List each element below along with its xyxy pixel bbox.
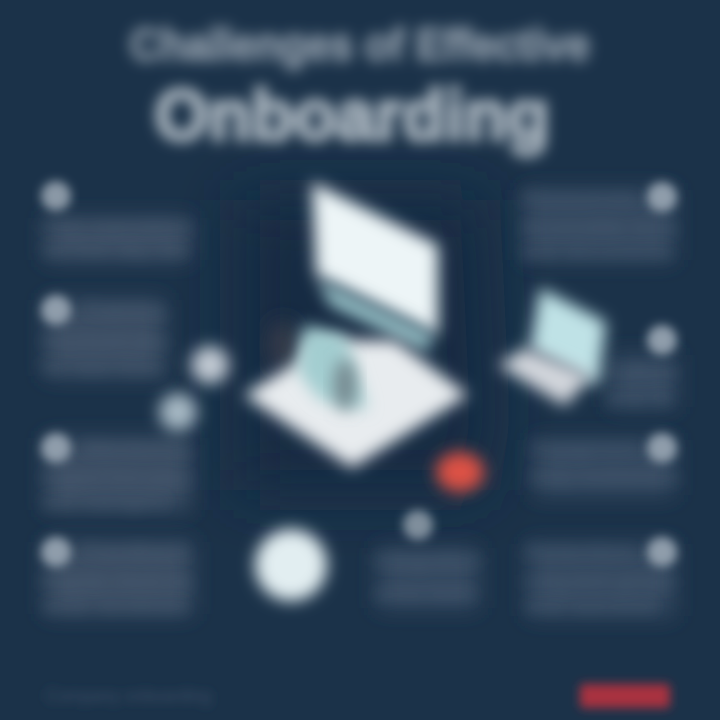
panel: right column items [522,182,677,616]
icon: red badge [436,452,484,492]
item: right 3 [532,433,677,495]
item: left 4: and reviews [42,596,187,616]
panel: left column items [41,181,192,616]
item: right 1: Accessible tools [522,218,677,238]
item: right 3: Engagement [532,438,637,458]
item: left 1 [41,181,192,260]
item: right 1: and documents [522,242,672,262]
item: left 3: Mentoring [84,438,189,458]
item: right 4: and success [525,596,655,616]
item: right 4 [525,537,677,616]
title: Challenges of Effective [130,19,590,70]
background shading [240,200,490,490]
item: left 3 [41,433,192,512]
item: right 1: Resources [522,188,637,208]
title [130,19,590,156]
icon: small circle [403,510,433,540]
panel: lower centre item [375,510,480,608]
icon: bubble lower [159,393,197,431]
item: right 3: Early involvement [532,468,677,488]
item: left 3: Support from peers [42,468,192,488]
icon: large circle [255,529,327,601]
footer: red button [580,684,670,708]
item: right 2: and fit [606,388,671,408]
item: left 2 [41,295,167,378]
item: right 4: Long-term growth [525,572,675,592]
small accent [271,321,295,369]
screen [312,182,438,335]
footer: source text: Company onboarding [46,686,211,706]
item: right 2 [606,325,677,408]
figure [334,359,356,411]
illustration: small laptop [498,288,606,406]
item: left 1: Clear expectations [42,216,192,236]
item: left 1: set from day one [42,240,187,260]
item: left 4 [41,537,192,616]
item: left 2: Structured plan [42,332,167,352]
item: left 3: and managers [42,492,167,512]
item: left 2: Training [84,300,164,320]
screen bottom glow [318,280,432,352]
item: left 2: for new hires [42,358,162,378]
item: right 1 [522,182,677,262]
icon: bubble upper [191,346,229,384]
item: left 4: Regular check-ins [42,572,192,592]
item: right 2: Culture [606,362,676,382]
keyboard base [244,340,468,468]
inner teal panel [298,325,368,410]
illustration: central laptop [244,182,468,468]
panel: lower centre item: across teams [375,584,475,604]
item: right 4: Retention [525,542,635,562]
item: left 4: Feedback [84,542,190,562]
title: Onboarding [154,76,550,156]
panel: lower centre item: Integration [375,550,480,570]
